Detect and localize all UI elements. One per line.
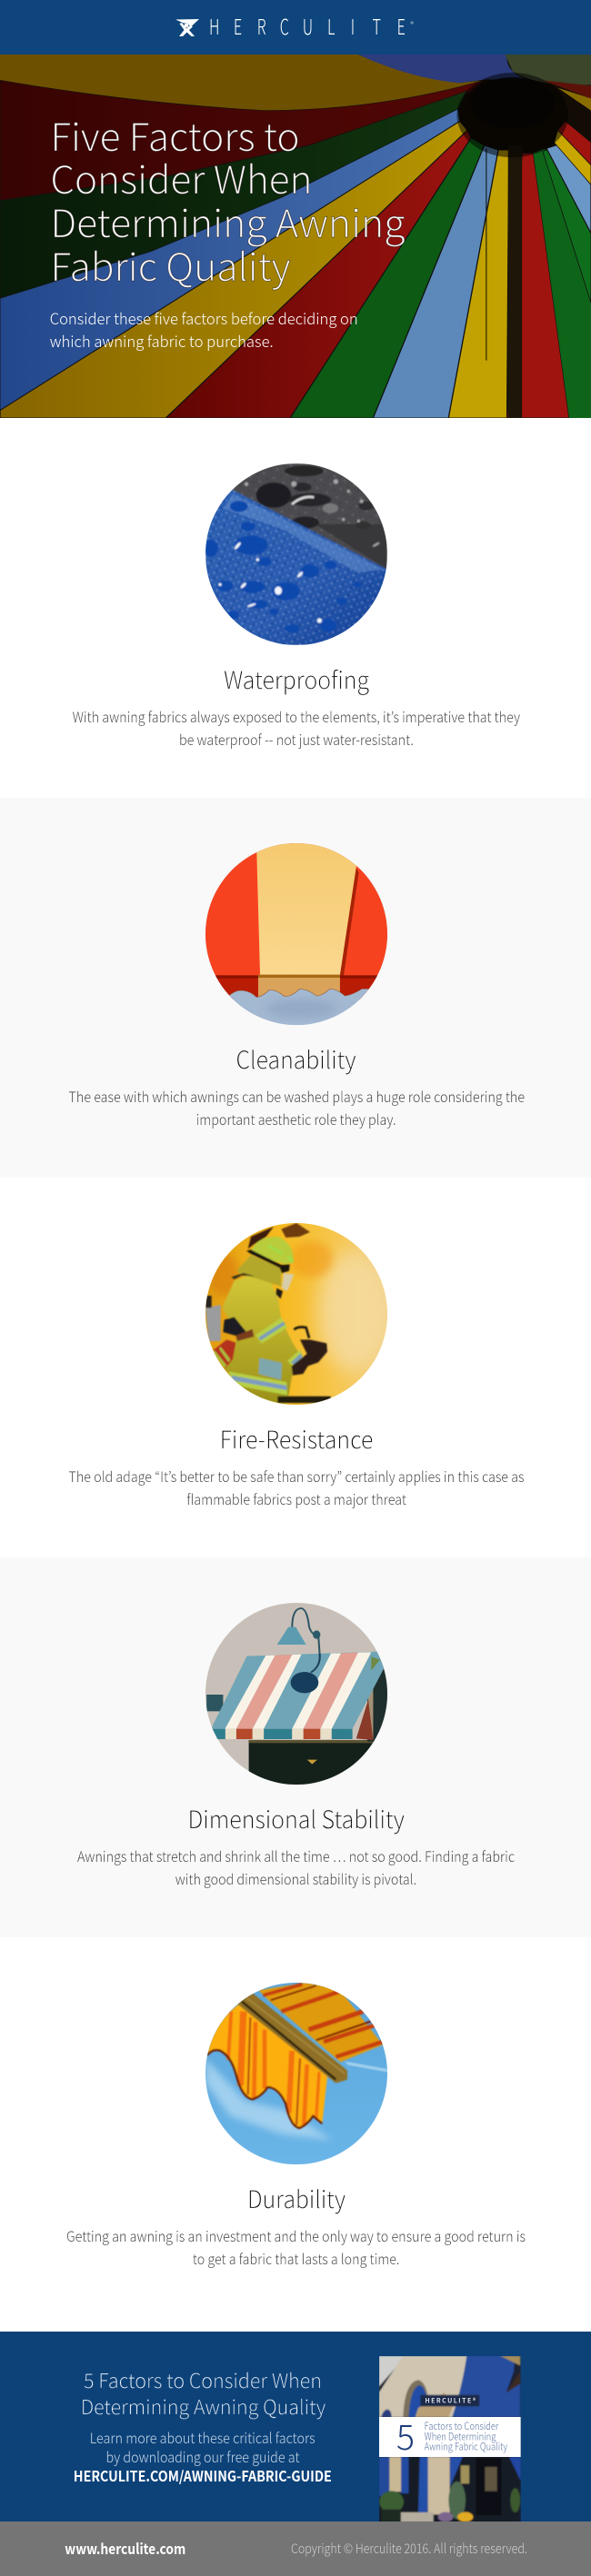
- right red band top: [558, 121, 591, 165]
- text: cleanability description: The ease with which awnings can be washed plays a huge role considering the: [69, 1087, 525, 1107]
- vertical pole: [508, 145, 522, 418]
- blue band: [0, 109, 460, 411]
- image: guide book cover: [379, 2356, 521, 2522]
- text: fire-resistance description: [69, 1467, 524, 1509]
- hero subtitle: Consider these five factors before deciding on: [50, 306, 358, 329]
- text: fire-resistance description: flammable fabrics post a major threat: [186, 1489, 406, 1509]
- text: guide description: Learn more about these critical factors: [90, 2426, 316, 2448]
- window: [249, 1740, 375, 1785]
- hero subtitle: [50, 306, 358, 352]
- hero title: Five Factors to: [51, 107, 300, 163]
- text: guide description: by downloading our free guide at: [105, 2445, 300, 2467]
- red band: [165, 130, 471, 418]
- hero banner with radial awning photo: [0, 55, 591, 418]
- hero title: Determining Awning: [51, 194, 406, 249]
- blue fabric: [205, 490, 387, 645]
- panel: cleanability: [69, 843, 524, 1129]
- heading: dimensional stability: Dimensional Stability: [187, 1800, 405, 1835]
- upper awning: [258, 1983, 383, 2062]
- valance: [211, 1729, 353, 1739]
- cover photo top: [379, 2356, 406, 2387]
- coat: [222, 1275, 298, 1405]
- cover title: Factors to Consider: [425, 2419, 499, 2433]
- cover numeral: 5: [396, 2410, 415, 2460]
- valance: [207, 2004, 327, 2128]
- cover white band: [379, 2417, 521, 2457]
- reflective stripes: [255, 1318, 287, 1344]
- footer copyright: Copyright © Herculite 2016. All rights reserved.: [291, 2539, 527, 2558]
- bottom rail: [277, 1397, 331, 1403]
- text: durability description: Getting an awning is an investment and the only way to ensure a good return is: [66, 2226, 526, 2246]
- awning stripes: [211, 1652, 386, 1729]
- dark red band: [0, 80, 485, 201]
- header bar: [0, 0, 591, 55]
- text: cleanability description: [69, 1087, 525, 1129]
- image: striped awning with lamp: [204, 1599, 392, 1788]
- right green band: [534, 148, 591, 418]
- pocket: [258, 1358, 282, 1380]
- cover title: Awning Fabric Quality: [425, 2440, 507, 2454]
- hood: [237, 1255, 281, 1287]
- text: waterproofing description: [73, 707, 520, 750]
- helmet: [251, 1237, 294, 1264]
- hub shade: [456, 73, 568, 157]
- light blue band: [373, 145, 498, 418]
- bar: [237, 1992, 347, 2084]
- arm shadow and gloves: [223, 1317, 246, 1336]
- logo plate text: HERCULITE®: [425, 2397, 476, 2406]
- logo plate: [420, 2395, 479, 2406]
- text: waterproofing description: With awning fabrics always exposed to the elements, it’s imperative that they: [73, 707, 520, 727]
- heading: waterproofing: Waterproofing: [224, 661, 370, 696]
- right yellow band: [554, 130, 591, 184]
- panel: durability: [0, 1937, 591, 2332]
- cover title: [425, 2419, 507, 2454]
- mustard band: [0, 121, 467, 418]
- text: dimensional stability description: Awnings that stretch and shrink all the time … not so good. Finding a fabric: [77, 1846, 515, 1866]
- clouds: [205, 2058, 333, 2140]
- footer bar: [0, 2521, 591, 2576]
- right red band: [507, 153, 569, 418]
- footer website: www.herculite.com: [65, 2537, 185, 2559]
- text: durability description: to get a fabric that lasts a long time.: [193, 2249, 400, 2269]
- text: guide description: [90, 2426, 316, 2467]
- panel: waterproofing: [73, 463, 520, 749]
- text: waterproofing description: be waterproof -- not just water-resistant.: [179, 730, 414, 750]
- dark green band: [0, 91, 467, 298]
- yellow band: [448, 150, 509, 418]
- text: durability description: [66, 2226, 526, 2269]
- heading: cleanability: Cleanability: [236, 1040, 356, 1076]
- icon: Herculite logo figure: [175, 19, 199, 36]
- hero subtitle: which awning fabric to purchase.: [50, 329, 274, 352]
- heading: guide title: 5 Factors to Consider When: [84, 2365, 322, 2394]
- heading: guide title: Determining Awning Quality: [81, 2392, 326, 2421]
- cover title: When Determining: [425, 2430, 496, 2444]
- heading: fire-resistance: Fire-Resistance: [220, 1420, 373, 1456]
- right light blue band: [546, 144, 591, 234]
- registered mark: ®: [411, 20, 415, 29]
- hero title: Consider When: [51, 150, 313, 205]
- hero title: Fabric Quality: [51, 237, 291, 293]
- nozzle: [292, 1339, 327, 1376]
- green band: [290, 138, 485, 418]
- hero title: [51, 107, 406, 293]
- text: dimensional stability description: with good dimensional stability is pivotal.: [175, 1869, 416, 1889]
- image: water drops on fabric: [204, 463, 387, 645]
- lamp: [292, 1608, 320, 1654]
- logo wordmark: HERCULITE: [209, 10, 406, 41]
- cover photo bottom: [379, 2457, 521, 2522]
- panel: guide call to action: [0, 2332, 591, 2522]
- image: orange awning against sky: [205, 1983, 387, 2164]
- heading: durability: Durability: [247, 2180, 346, 2215]
- image: firefighter: [205, 1223, 390, 1405]
- top bands: [0, 55, 485, 111]
- text: dimensional stability description: [77, 1846, 515, 1889]
- panel: dimensional stability: [77, 1603, 515, 1888]
- backpack: [205, 1305, 221, 1341]
- text: fire-resistance description: The old adage “It’s better to be safe than sorry” certainly applies in this case as: [69, 1467, 524, 1487]
- panel: fire-resistance: [69, 1223, 524, 1508]
- wall side: [367, 1666, 387, 1742]
- link: guide url: HERCULITE.COM/AWNING-FABRIC-GUIDE: [74, 2464, 332, 2486]
- image: red and cream awning: [204, 839, 392, 1029]
- heading: guide title: [81, 2365, 326, 2421]
- text: cleanability description: important aesthetic role they play.: [196, 1109, 396, 1129]
